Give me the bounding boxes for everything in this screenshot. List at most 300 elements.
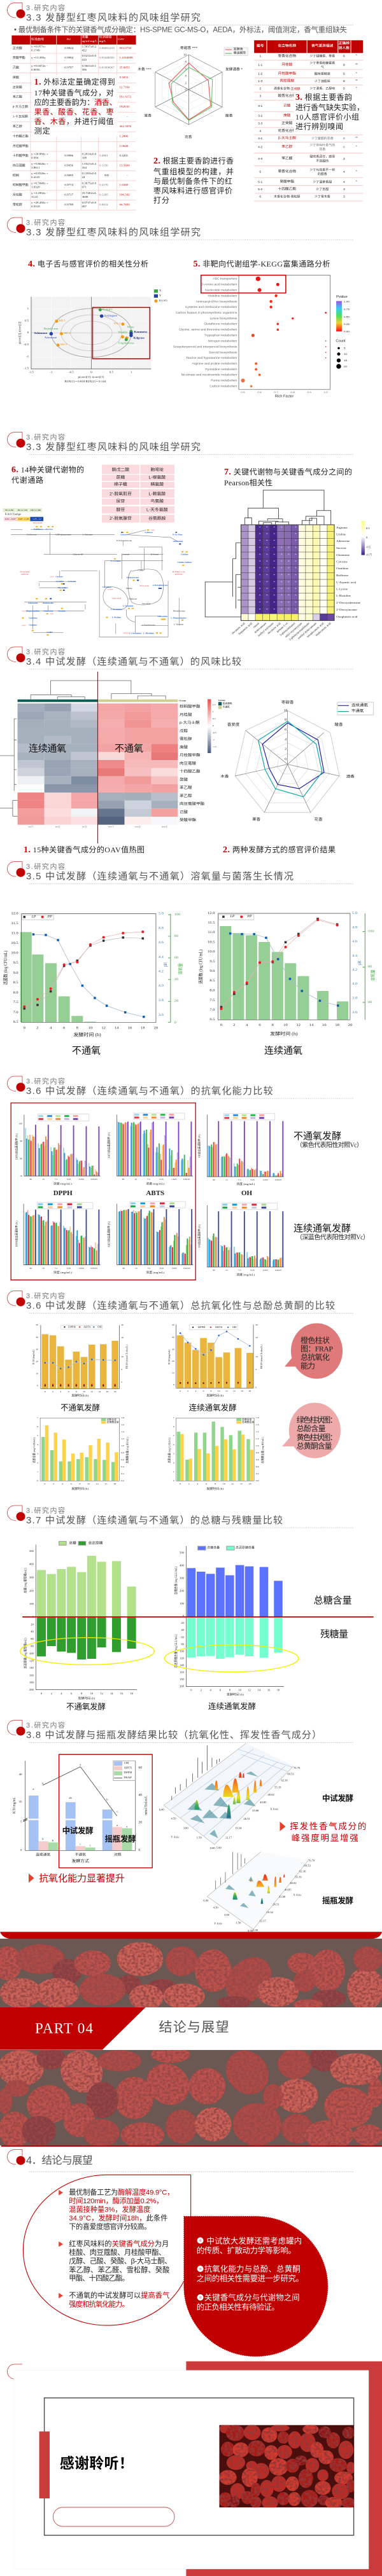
chart: continuous aeration: 18 <box>335 1024 339 1027</box>
chart: continuous aeration: 0 <box>220 1024 222 1027</box>
chart: FRAP continuous aeration: 2 <box>187 1390 188 1392</box>
callout 2 text: 2. 根据主要香韵进行香 <box>153 156 234 165</box>
slide: 3.3 metabolites <box>3 433 372 641</box>
chart overlay labels <box>62 1825 136 1844</box>
bar chart: ABTS no aeration: 7.5 <box>147 1178 150 1181</box>
table: aroma omission test: 9 <box>343 137 345 140</box>
biplot chart: FX-2 <box>114 322 121 326</box>
chart: continuous aeration: 5.0 <box>352 911 357 915</box>
chart: sugar no aeration: 100 <box>29 1652 34 1655</box>
table: standard curves and OAV: 0.1749 <box>31 50 40 52</box>
OAV heatmap: Group <box>218 699 225 702</box>
table: aroma omission test: 1-2 <box>258 73 263 75</box>
table: aroma omission test: 花香 <box>319 147 326 151</box>
table: standard curves and OAV: 含量 <box>82 35 88 39</box>
slide: 3.3 correlation and KEGG <box>8 218 354 398</box>
3D chromatogram: pilot fermentation: 19.34 <box>235 1827 242 1829</box>
bar chart: IC50 and FRAP: a <box>117 1824 118 1827</box>
KEGG bubble chart: 0.50 <box>344 315 350 318</box>
KEGG bubble chart: 0.5 <box>241 391 245 394</box>
OAV heatmap: 苯乙醇 <box>180 793 192 798</box>
OAV heatmap: 肉豆蔻酸 <box>180 761 196 766</box>
section header 3.7: 3.7 中试发酵（连续通氧与不通氧）的总糖与残糖量比较 <box>26 1514 283 1526</box>
table: aroma omission test: * <box>356 54 357 57</box>
red backing panel <box>186 2361 382 2576</box>
chart: FRAP no aeration <box>32 1324 129 1397</box>
table: standard curves and OAV: 35.0053 <box>120 67 130 69</box>
bar chart: OH no aeration: 7.5 <box>238 1179 241 1181</box>
chart: sugar continuous aeration: 12 <box>248 1689 251 1691</box>
table: standard curves and OAV: 己酸 <box>13 66 19 69</box>
table: standard curves and OAV: 0.9986 <box>64 155 74 158</box>
table: aroma omission test: 4-2 <box>258 146 263 148</box>
table: aroma omission test: 2 <box>259 87 262 90</box>
bar chart: IC50 and FRAP: c <box>117 1810 118 1813</box>
table: aroma omission test: 甜花香还在，感受 <box>309 155 336 159</box>
callout 1 text: 1. 外标法定量确定得到 <box>34 77 115 87</box>
bar chart: DPPH no aeration: 70 <box>20 1175 22 1177</box>
bar chart: ABTS continuous aeration: 30 <box>122 1267 125 1270</box>
chart: no aeration: pH <box>164 962 168 967</box>
bar chart: DPPH no aeration <box>14 1114 101 1186</box>
table: aroma omission test: 正癸酸 <box>281 121 293 125</box>
chart: continuous aeration: 12 <box>297 1024 301 1027</box>
table: aroma omission test: 化合物名称 <box>278 43 297 48</box>
KEGG bubble chart: Rich Factor <box>275 395 294 398</box>
chart: sugar no aeration: 6 <box>71 1692 73 1695</box>
table: standard curves and OAV: y =5.8626x + <box>31 163 48 166</box>
conclusions list: 34.9°C，发酵时间18h，此条件 <box>69 2213 167 2222</box>
table: standard curves and OAV: β-大马士酮 <box>13 104 28 109</box>
table: standard curves and OAV: 3-十五烷酮 <box>13 114 28 118</box>
table: standard curves and OAV: 正癸酸 <box>13 85 22 89</box>
bar chart: OH no aeration: OH自由基清除率 (%) <box>197 1134 201 1158</box>
chart: FRAP no aeration: 12 <box>90 1390 93 1393</box>
heatmap: metabolite vs aroma correlation: Arginine <box>336 527 348 530</box>
section header 3.3: 3.研究内容 <box>26 218 65 226</box>
callout 3 cover <box>294 90 365 132</box>
biplot chart: Sshimono <box>34 332 48 335</box>
metabolic pathway diagram: Xylulose <box>145 531 153 534</box>
table: aroma omission test: 庚酸 <box>283 113 291 118</box>
chart: sugar continuous aeration: 14 <box>258 1689 261 1691</box>
chart: continuous aeration: 6.5 <box>209 1018 215 1021</box>
table: aroma omission test <box>254 40 363 201</box>
chart: continuous aeration: 80 <box>368 966 372 969</box>
metabolic pathway diagram: 0.07 - 1.25 <box>18 518 29 520</box>
bar chart: DPPH continuous aeration: 0.8125 <box>90 1267 97 1270</box>
bar chart: IC50 and FRAP: 不通氧 <box>75 1852 87 1857</box>
chart: sugar no aeration: 40 <box>31 1630 34 1633</box>
KEGG bubble chart: Taurine and hypotaurine metabolism <box>186 356 237 359</box>
table: standard curves and OAV: 标准曲线 <box>31 37 44 41</box>
chart: phenols and flavonoids no aeration: 18 <box>113 1483 116 1485</box>
table: aroma omission test: 果香化合物 <box>278 169 297 174</box>
heatmap: metabolite vs aroma correlation: -0.5 <box>366 546 371 548</box>
bar chart: IC50 and FRAP: 20 <box>138 1821 142 1824</box>
chart: FRAP continuous aeration: 发酵时间 (h) <box>206 1394 223 1397</box>
section header 3.5: 3.5 中试发酵（连续通氧与不通氧）溶氧量与菌落生长情况 <box>26 871 294 882</box>
KEGG bubble chart: Pyrimidine metabolism <box>205 368 237 371</box>
chart: no aeration: 9.0 <box>13 971 18 975</box>
heatmap: metabolite vs aroma correlation: ****** <box>259 561 297 564</box>
table: aroma omission test: 少了菠萝香甜 <box>313 180 332 184</box>
table: key metabolites <box>102 465 174 523</box>
KEGG bubble chart: Tryptophan metabolism <box>204 334 237 337</box>
KEGG bubble chart: 5 <box>344 347 346 350</box>
section header 3.7: 3.研究内容 <box>26 1506 65 1515</box>
callout bubble: FRAP: 总抗氧化 <box>301 1352 330 1362</box>
callout 2 text: 气重组模型的构建，并 <box>153 167 234 176</box>
table: aroma omission test: * <box>356 180 357 183</box>
chart: sugar no aeration: 500 <box>29 1549 34 1553</box>
chart: sugar continuous aeration: 60 <box>181 1636 184 1638</box>
heatmap: metabolite vs aroma correlation: pentan-1-ol <box>276 622 289 634</box>
metabolic pathway diagram: Adenosine <box>28 602 38 604</box>
table: standard curves and OAV: y =0.057x+ <box>31 46 46 48</box>
metabolic pathway diagram: D-Glucose <box>27 534 37 536</box>
bar chart: IC50 and FRAP: 35 <box>18 1801 22 1804</box>
metabolic pathway diagram: Citrulline <box>102 586 111 588</box>
metabolic pathway diagram: L-Glutamine <box>129 632 142 634</box>
chart: no aeration: 10.5 <box>11 942 18 945</box>
biplot chart: -1 <box>50 371 53 374</box>
chart: continuous aeration: 4 <box>246 1024 248 1027</box>
3D chromatogram: pilot fermentation: 0.00 <box>210 1846 215 1850</box>
table: standard curves and OAV: 1928.65 <box>120 106 130 109</box>
section header 3.3 <box>8 433 354 454</box>
metabolic pathway diagram: L-Arginine <box>123 605 134 607</box>
OAV heatmap: 1 <box>213 710 214 713</box>
radar chart: sensory evaluation: 8 <box>285 719 286 722</box>
chart: no aeration: 活菌数 (log CFU/mL) <box>3 951 8 985</box>
chart: phenols and flavonoids no aeration: 2 <box>37 1462 38 1464</box>
assay labels <box>53 1189 252 1197</box>
KEGG bubble chart: Carbon fixation in photosynthetic organisms <box>176 311 237 314</box>
biplot chart: Weakly <box>118 331 128 334</box>
bar chart: DPPH no aeration: 1.625 <box>79 1178 84 1181</box>
chart: phenols and flavonoids continuous aeration: 18 <box>249 1483 251 1485</box>
callout bubble: phenols and flavonoids: 绿色柱状图： <box>297 1415 337 1425</box>
chart: phenols and flavonoids no aeration: 7 <box>37 1416 38 1419</box>
chart: continuous aeration: 4.2 <box>352 968 357 972</box>
table: standard curves and OAV: 0.01646503 <box>99 57 115 60</box>
table: aroma omission test: 不到甜的 <box>316 159 329 163</box>
3D chromatogram: pilot fermentation: 12.17 <box>225 1836 232 1839</box>
chart: phenols and flavonoids no aeration: 1 <box>37 1471 38 1473</box>
table: aroma omission test: 少了蜜甜的花香 <box>311 136 334 141</box>
chart: phenols and flavonoids continuous aeration: 总黄酮含量 (mg RE/mL) <box>260 1437 265 1464</box>
chart: sugar no aeration: 100 <box>29 1602 34 1605</box>
chart: continuous aeration: 4.4 <box>352 954 357 958</box>
3D chromatogram: pilot fermentation: 3.00 <box>183 1827 188 1829</box>
chart: phenols and flavonoids continuous aeration: 8 <box>215 1483 216 1485</box>
bar chart: OH continuous aeration: 15 <box>225 1269 228 1271</box>
outlook list: 抗氧化能力与总酚、总黄酮 <box>204 2264 301 2274</box>
table: standard curves and OAV: - <box>127 174 128 177</box>
labels: total sugar and residual sugar: 总糖含量 <box>314 1595 352 1606</box>
chart: sugar no aeration: 2 <box>51 1692 52 1695</box>
biplot chart: Kouqiry <box>103 308 113 311</box>
table: key metabolites: L-赖氨酸 <box>148 491 166 496</box>
table: aroma omission test: 4 <box>343 181 345 183</box>
section header 3.4: 3.4 中试发酵（连续通氧与不通氧）的风味比较 <box>26 656 241 667</box>
assay labels: ABTS <box>146 1189 164 1197</box>
heatmap: metabolite vs aroma correlation: dodecanoic acid <box>315 622 332 637</box>
table: aroma omission test: 酸味香精感 <box>315 72 330 76</box>
KEGG bubble chart: Glycine, serine and threonine metabolism <box>179 328 237 331</box>
slide: 3.6 antioxidant bars <box>8 1076 369 1280</box>
radar chart: sensory evaluation: 4 <box>285 738 286 742</box>
OAV heatmap: 1.5 <box>213 703 216 706</box>
section header 3.6 <box>8 1076 354 1098</box>
biplot chart: Kammess <box>134 331 147 334</box>
metabolic pathway diagram: 6h vs 12h <box>18 509 27 511</box>
table: aroma omission test: 香气差异描述 <box>311 43 334 48</box>
bar chart: IC50 and FRAP <box>13 1754 152 1868</box>
callout bubble: FRAP: 橙色柱状 <box>301 1335 330 1345</box>
metabolic pathway diagram: TCA cycle <box>139 585 150 587</box>
heatmap: metabolite vs aroma correlation: methyl dodecanoate <box>297 622 318 640</box>
section header 3.4 <box>8 647 354 669</box>
section header 3.6: 3.6 中试发酵（连续通氧与不通氧）总抗氧化性与总酚总黄酮的比较 <box>26 1300 335 1312</box>
chart: no aeration: 9.5 <box>13 962 18 965</box>
radar chart: sensory evaluation: 木香 <box>220 774 229 779</box>
heatmap: metabolite vs aroma correlation: decanoic acid <box>232 622 246 635</box>
3D chromatogram: shake flask: 69.53 <box>304 1864 311 1867</box>
heatmap overlay labels: 不通氧 <box>115 743 143 754</box>
KEGG bubble chart: 0.7 <box>274 391 278 394</box>
callout bubble: phenols and flavonoids: 黄色柱状图： <box>297 1432 337 1442</box>
OAV heatmap: 0.5 <box>213 717 216 720</box>
OAV heatmap: -1.5 <box>213 745 216 748</box>
callout bubble: phenols and flavonoids: 总酚含量 <box>297 1423 326 1433</box>
bar chart: IC50 and FRAP: FRAP <box>124 1776 132 1780</box>
table: standard curves and OAV: 0.9824 <box>64 47 74 50</box>
bar chart: OH no aeration: 3.25 <box>250 1179 255 1181</box>
chart: continuous aeration: 14 <box>309 1024 313 1027</box>
table: aroma omission test: 正确辨 <box>339 41 350 45</box>
section header 3.4: 3.研究内容 <box>26 647 65 656</box>
radar chart: sensory evaluation: 喜爱度 <box>227 722 239 727</box>
heatmap: metabolite vs aroma correlation: 0 <box>366 536 367 539</box>
bullet text: • 最优制备条件下的关键香气成分确定：HS-SPME GC-MS-O，AEDA，外标法，阈值测定，香气重组缺失 <box>14 25 348 34</box>
KEGG bubble chart: 0.75 <box>344 308 350 310</box>
chart: sugar continuous aeration: 180 <box>180 1678 184 1681</box>
table: key metabolites: 尿苷 <box>117 499 125 504</box>
table: standard curves and OAV: 161.6172 <box>120 96 132 99</box>
3D chromatogram: shake flask: 62.36 <box>299 1870 306 1873</box>
heatmap: metabolite vs aroma correlation: 0.5 <box>366 527 370 530</box>
table: key metabolites: 棉子糖 <box>114 481 127 487</box>
bar chart: IC50 and FRAP: 60 <box>138 1766 142 1769</box>
chart: sugar no aeration <box>23 1541 137 1700</box>
table: standard curves and OAV: OAV <box>118 38 125 41</box>
chart: no aeration: 4.6 <box>159 941 164 945</box>
bar chart: OH continuous aeration: 30 <box>213 1269 215 1271</box>
table: standard curves and OAV: 24 <box>82 176 85 179</box>
chart: FRAP continuous aeration: 20 <box>172 1360 174 1362</box>
chart: sugar no aeration: 180 <box>29 1681 34 1684</box>
chart captions: 不通氧发酵 <box>66 1701 106 1711</box>
bar chart: DPPH no aeration: 3.25 <box>67 1178 71 1181</box>
metabolic pathway diagram <box>3 508 192 637</box>
callout 1 text <box>34 77 117 135</box>
table: standard curves and OAV: 1.6360 <box>120 184 129 187</box>
KEGG bubble chart: Sesquiterpenoid and triterpenoid biosynthesis <box>173 345 237 348</box>
section header 3.3 <box>8 218 354 240</box>
heatmap: metabolite vs aroma correlation: Oxoglutaric acid <box>336 616 358 619</box>
chart: no aeration: 8 <box>76 1027 78 1030</box>
table: key metabolites: 胞嘧啶 <box>151 467 164 473</box>
chart: sugar no aeration: 0 <box>32 1616 34 1619</box>
OAV heatmap: 月桂酸 <box>180 712 192 717</box>
chart: sugar continuous aeration: 0 <box>183 1614 184 1617</box>
chart: phenols and flavonoids no aeration: 1.0 <box>121 1444 124 1447</box>
red tab <box>39 2432 50 2498</box>
chart: sugar no aeration: 200 <box>29 1688 34 1691</box>
bar chart: IC50 and FRAP: OH <box>124 1762 129 1765</box>
chart: sugar continuous aeration: 200 <box>180 1589 184 1592</box>
metabolic pathway diagram: Urea cycle <box>112 597 122 599</box>
metabolic pathway diagram: pathway <box>21 573 29 576</box>
chart: FRAP continuous aeration: 40 <box>172 1336 174 1339</box>
table: standard curves and OAV: 雪松醇 <box>13 202 22 207</box>
table: aroma omission test: * <box>356 145 357 148</box>
KEGG bubble chart: Count <box>336 340 346 343</box>
table: aroma omission test: 少了油脂味 <box>315 79 330 83</box>
bar chart: ABTS no aeration <box>106 1113 193 1186</box>
table: key metabolites: L-缬氨酸 <box>148 474 166 480</box>
OAV heatmap: WS① <box>108 825 115 828</box>
OAV heatmap: 肉豆蔻酸甲酯 <box>180 801 204 806</box>
chart overlay labels: 中试发酵 <box>62 1825 94 1835</box>
heading 7 <box>224 467 352 487</box>
biplot chart: 0.5 <box>25 320 29 322</box>
bar chart: ABTS continuous aeration: 浓度 (mg/mL) <box>146 1270 165 1275</box>
table: aroma omission test: 7 <box>343 130 345 133</box>
chart: no aeration: 18 <box>141 1027 145 1030</box>
table: aroma omission test: 花香化合物 <box>278 128 297 133</box>
chart: FRAP continuous aeration: 10 <box>172 1372 174 1375</box>
heatmap: metabolite vs aroma correlation: methyl myristate <box>257 622 275 637</box>
section header 3.5 <box>8 861 354 884</box>
chart: no aeration: 6.5 <box>13 1021 18 1024</box>
biplot chart: t(corr) <box>159 300 167 302</box>
biplot chart: Winy <box>127 326 134 329</box>
3D chromatogram: pilot fermentation: 4.50 <box>171 1817 176 1820</box>
chart: phenols and flavonoids no aeration: 5 <box>37 1434 38 1437</box>
table: aroma omission test: 4 <box>259 130 262 133</box>
metabolic pathway diagram: Fumarate <box>129 598 138 600</box>
OAV heatmap: 苯乙酸 <box>180 786 192 790</box>
side labels: （深蓝色代表阳性对照Vc） <box>296 1233 369 1242</box>
section header 3.3: 3.研究内容 <box>26 433 65 441</box>
bar chart: IC50 and FRAP: mmol Trolox/L <box>145 1796 148 1815</box>
jujube photo <box>218 2424 355 2509</box>
callout 3 text: 进行辨别嗅闻 <box>295 122 343 131</box>
chart: FRAP no aeration: OH <box>97 1326 102 1329</box>
chart: sugar continuous aeration: 500 <box>180 1551 184 1554</box>
note: antioxidant capacity: 抗氧化能力显著提升 <box>39 1873 125 1884</box>
heatmap: metabolite vs aroma correlation: Ornithine <box>336 567 348 571</box>
chart: phenols and flavonoids continuous aeration: 0.8 <box>256 1451 259 1454</box>
metabolic pathway diagram: Cytidine <box>55 580 64 583</box>
conclusions list: 强度和抗氧化能力。 <box>69 2299 129 2308</box>
metabolic pathway diagram: Cytosine <box>68 580 76 583</box>
table: standard curves and OAV: 9.5053 <box>120 76 129 80</box>
heatmap: metabolite vs aroma correlation: 2-phenylacetaldehyde <box>288 622 311 641</box>
OAV heatmap: 癸酸甲酯 <box>180 818 196 822</box>
table: standard curves and OAV: 1.2806 <box>120 135 129 138</box>
metabolic pathway diagram: L-Tyrosine <box>174 623 184 625</box>
radar chart: recombination model: 发酵酒香 * <box>225 67 243 71</box>
outlined frame <box>45 2398 354 2535</box>
bar chart: IC50 and FRAP: 40 <box>18 1773 22 1776</box>
chart: sugar no aeration: 200 <box>29 1589 34 1592</box>
bar chart: IC50 and FRAP: 40 <box>138 1794 142 1797</box>
chart: FRAP continuous aeration: 0 <box>180 1390 181 1392</box>
conclusions list: 时间120min，酶添加量0.2%， <box>69 2196 163 2205</box>
chart: FRAP continuous aeration: 18 <box>248 1390 251 1392</box>
table: standard curves and OAV: 422 <box>82 50 87 52</box>
chart captions <box>66 1701 256 1711</box>
chart: continuous aeration: LP <box>230 915 235 918</box>
chart: phenols and flavonoids no aeration: 1.8 <box>121 1416 124 1419</box>
KEGG bubble chart: 20 <box>344 365 348 368</box>
chart: no aeration: 4 <box>50 1027 52 1030</box>
heatmap: metabolite vs aroma correlation: 2'-Deoxyinosine <box>336 609 357 612</box>
bar chart: IC50 and FRAP: 连续通氧 <box>36 1852 51 1857</box>
chart: FRAP continuous aeration: ABTS <box>215 1326 223 1329</box>
table: standard curves and OAV: 039 <box>82 59 87 62</box>
table: aroma omission test: 的甜香 <box>318 172 327 176</box>
chart: phenols and flavonoids continuous aeration: 3 <box>173 1453 174 1455</box>
table: standard curves and OAV: 0.9717 <box>64 194 74 197</box>
bar chart: DPPH no aeration: 0.8125 <box>90 1178 97 1181</box>
radar chart: sensory evaluation: 10 <box>284 709 288 712</box>
section header 3.3: 3.3 发酵型红枣风味料的风味组学研究 <box>26 441 201 453</box>
chart: phenols and flavonoids no aeration: 0.2 <box>121 1472 124 1475</box>
chart: continuous aeration: 100 <box>368 930 374 933</box>
chart: phenols and flavonoids continuous aeration: 2 <box>188 1483 190 1485</box>
table: standard curves and OAV: y =0.0472x - <box>31 65 48 68</box>
heading 6 <box>11 465 84 485</box>
table: standard curves and OAV: 66.7693 <box>120 204 130 207</box>
bar chart: DPPH continuous aeration: 7.5 <box>55 1267 58 1270</box>
labels: total sugar and residual sugar <box>314 1595 352 1640</box>
OAV heatmap: 戊醇 <box>180 728 188 733</box>
chart: no aeration: 20 <box>154 1027 158 1030</box>
heatmap overlay labels: 连续通氧 <box>29 743 66 754</box>
chart: FRAP no aeration: IC50 (mg/mL) <box>32 1349 35 1364</box>
radar chart: recombination model: 重组模型 <box>234 51 246 55</box>
chart: continuous aeration: 10.5 <box>208 941 215 944</box>
table: standard curves and OAV: 164 <box>82 167 87 170</box>
chart: no aeration: 40 <box>174 978 178 981</box>
chart: sugar continuous aeration: 80 <box>181 1643 184 1645</box>
chart: FRAP continuous aeration: OH <box>232 1326 236 1329</box>
3D chromatogram: pilot fermentation: 62.36 <box>281 1779 288 1782</box>
conclusions list: 最优制备工艺为酶解温度49.9°C， <box>69 2187 174 2196</box>
chart: continuous aeration: 3.8 <box>352 997 357 1000</box>
bar chart: ABTS continuous aeration: 0.8125 <box>183 1267 190 1270</box>
chart: no aeration: 12 <box>101 1027 106 1030</box>
chart: FRAP continuous aeration: 4 <box>195 1390 196 1392</box>
chart: FRAP no aeration: 发酵时间 (h) <box>71 1394 88 1397</box>
table: aroma omission test: 3 <box>259 95 262 97</box>
biplot chart: Y <box>159 294 162 298</box>
